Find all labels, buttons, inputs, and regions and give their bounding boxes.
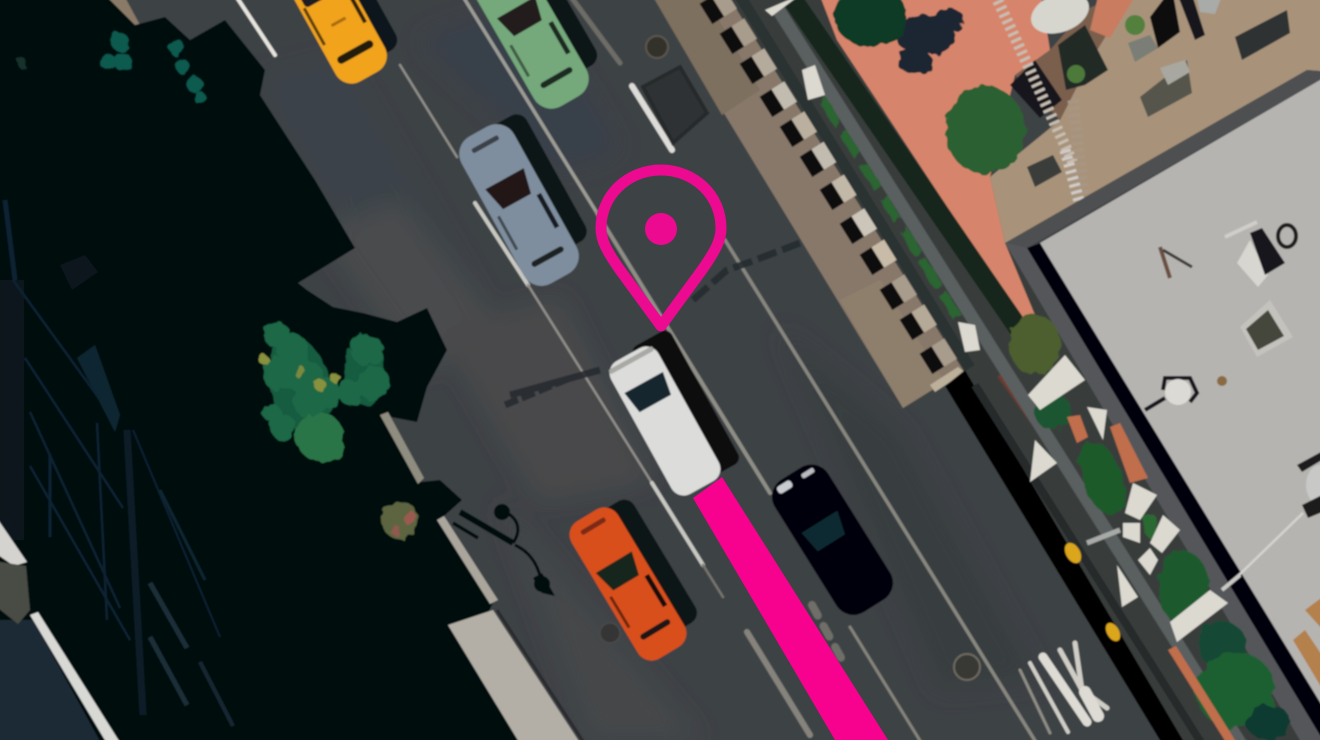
roof tire <box>1278 225 1296 247</box>
tan corner at top of shadow <box>95 0 140 28</box>
grey flat roof <box>1005 70 1320 740</box>
lamp post shadow <box>453 504 555 596</box>
bottom left ground and curb <box>0 505 126 740</box>
street lamp arm <box>1087 530 1120 543</box>
yellow taxi <box>271 0 407 90</box>
utility hatch <box>643 67 707 143</box>
white awnings and planters <box>765 0 1228 642</box>
building shadow on left <box>0 0 525 740</box>
terracotta courtyard <box>817 0 1050 320</box>
yellow traffic lights <box>1061 540 1123 644</box>
dark hedge along courtyard <box>793 0 1030 345</box>
roof right equipment <box>1297 446 1320 518</box>
curb and sidewalk by shadow <box>380 412 590 740</box>
tar scuffs on road <box>505 243 800 405</box>
wood pile <box>1293 630 1320 705</box>
terracotta planters <box>1067 415 1240 740</box>
planter greenery strip <box>823 100 958 318</box>
road tone variation <box>260 0 1040 740</box>
tree in building shadow <box>258 322 390 462</box>
route line <box>693 477 888 740</box>
dark service strip beside sidewalk <box>725 0 1320 740</box>
fire escape ladders <box>992 0 1085 212</box>
location pin icon <box>601 170 721 326</box>
roof vent <box>1145 378 1197 410</box>
roof cart <box>1225 222 1285 287</box>
roof sticks <box>1160 247 1170 278</box>
green car <box>462 0 612 116</box>
roof hatch <box>1240 300 1293 357</box>
white van <box>603 328 744 501</box>
sidewalk with tree pits <box>648 0 965 408</box>
orange car <box>564 492 709 666</box>
grey car <box>452 108 602 293</box>
painted road marking strokes <box>1020 643 1107 733</box>
grey service strip <box>776 6 1252 740</box>
black shadow below sidewalk <box>945 370 1190 740</box>
manholes <box>600 36 980 680</box>
black car <box>764 457 900 623</box>
trees on right side <box>834 0 1290 740</box>
road lane markings <box>232 0 1042 740</box>
left building facade <box>5 200 233 726</box>
rooftop deck <box>990 0 1320 243</box>
flowering bush <box>381 501 419 539</box>
small trees top left <box>17 33 206 104</box>
utility rails beside sidewalk <box>735 0 1207 740</box>
courtyard tree shadow <box>895 8 964 74</box>
